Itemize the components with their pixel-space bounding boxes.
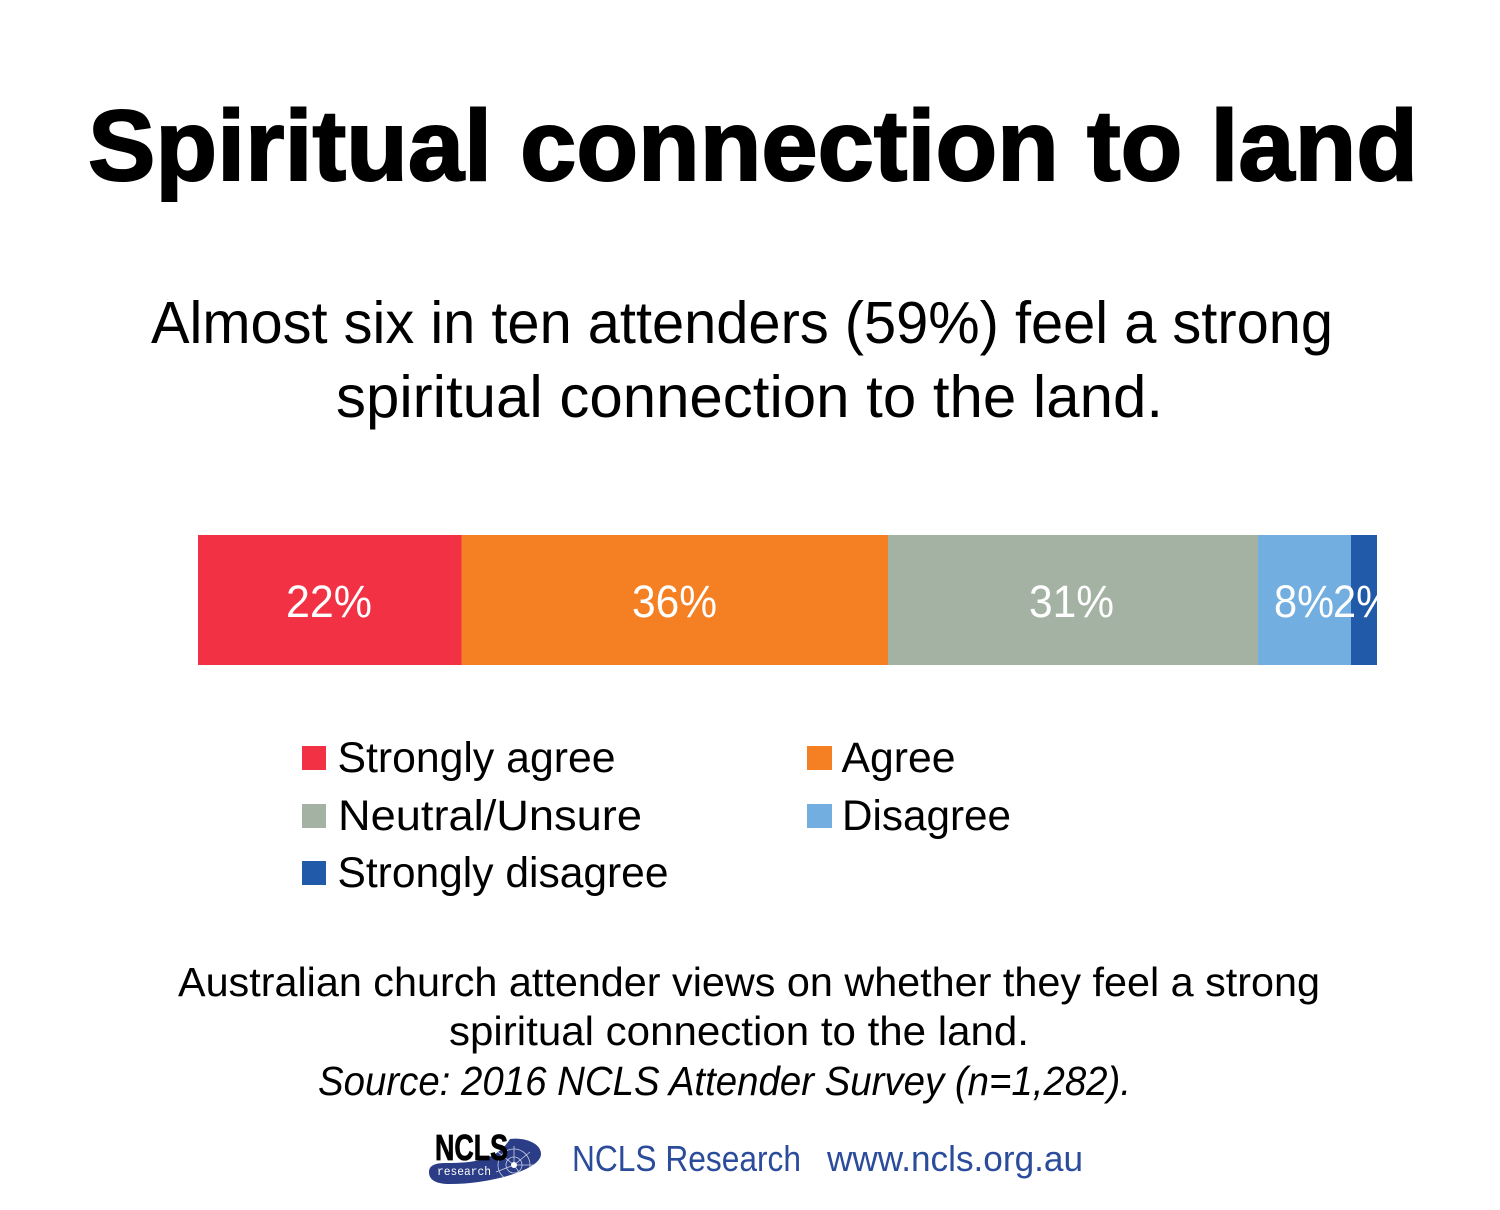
segment: agree 36% — [462, 535, 888, 665]
legend item: neutral/unsure: Neutral/Unsure — [338, 792, 642, 840]
legend item: disagree: Disagree — [842, 792, 1011, 840]
organisation name: NCLS Research — [572, 1138, 801, 1179]
legend item: strongly agree: Strongly agree — [338, 734, 616, 782]
legend — [302, 734, 1011, 897]
legend item: strongly disagree: Strongly disagree — [338, 849, 668, 897]
footnote description and source — [178, 959, 1320, 1104]
segment: neutral/unsure 31%: 31% — [1029, 576, 1114, 627]
subtitle: Almost six in ten attenders (59%) feel a strong — [151, 290, 1333, 356]
segment: disagree 8% — [1258, 535, 1351, 665]
icon: NCLS research logo: research — [437, 1165, 491, 1179]
segment: strongly disagree 2% — [1351, 535, 1377, 665]
website: www.ncls.org.au — [826, 1138, 1083, 1179]
label: 8%: 8% — [1274, 576, 1334, 627]
subtitle — [151, 290, 1333, 430]
segment: neutral/unsure 31% — [888, 535, 1258, 665]
segment: strongly agree 22% — [198, 535, 462, 665]
footnote description and source: spiritual connection to the land. — [449, 1008, 1029, 1054]
segment: strongly agree 22%: 22% — [286, 576, 372, 627]
subtitle: spiritual connection to the land. — [336, 364, 1163, 430]
footnote description and source: Source: 2016 NCLS Attender Survey (n=1,282). — [318, 1058, 1131, 1104]
title: Spiritual connection to land — [88, 90, 1418, 202]
stacked bar chart — [198, 535, 1393, 665]
segment: agree 36%: 36% — [632, 576, 717, 627]
icon: NCLS research logo — [429, 1134, 541, 1184]
legend item: agree: Agree — [842, 734, 956, 782]
icon: NCLS research logo: NCLS — [435, 1127, 508, 1168]
footnote description and source: Australian church attender views on whether they feel a strong — [178, 959, 1320, 1005]
